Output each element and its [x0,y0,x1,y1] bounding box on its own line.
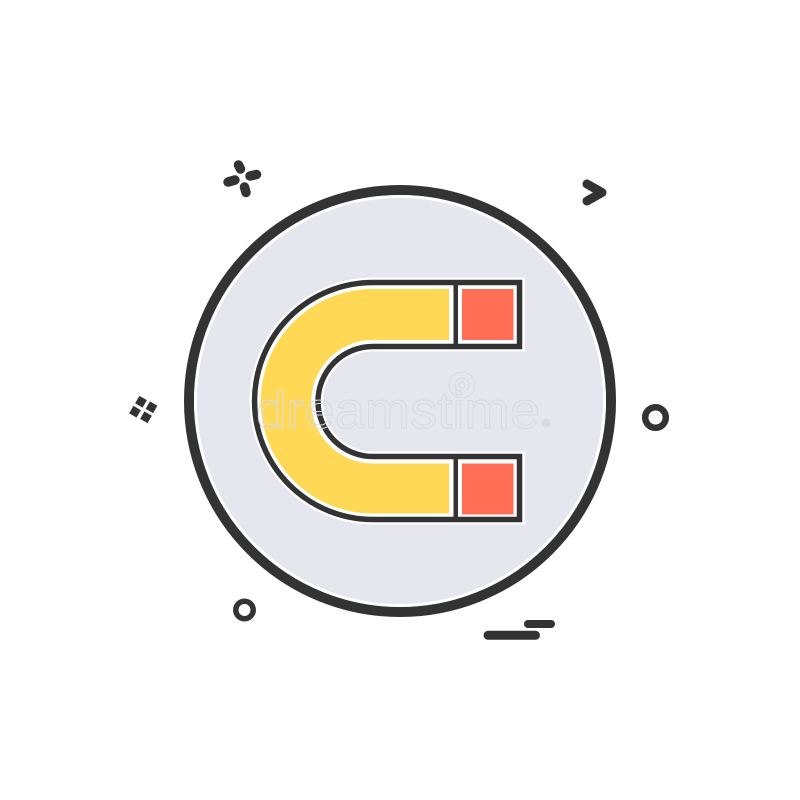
magnet dark outline [255,282,520,520]
magnet upper pole divider [454,283,458,346]
magnet white outer halo [255,282,520,520]
icon: small diamond squares [129,396,157,423]
icon: horseshoe magnet [255,282,520,520]
icon: chevron [587,184,602,201]
icon: bottom ring [236,601,253,619]
panel: circular badge [189,190,611,612]
magnet body yellow [261,289,449,514]
icon: dash lines [488,624,551,635]
icon: right ring [645,407,666,428]
magnet lower pole divider [454,457,458,520]
icon: four-petal sparkle [228,165,256,192]
magnet lower pole tip [462,464,514,514]
watermark text: dreamstime [256,382,540,440]
magnet upper pole tip [462,289,514,340]
